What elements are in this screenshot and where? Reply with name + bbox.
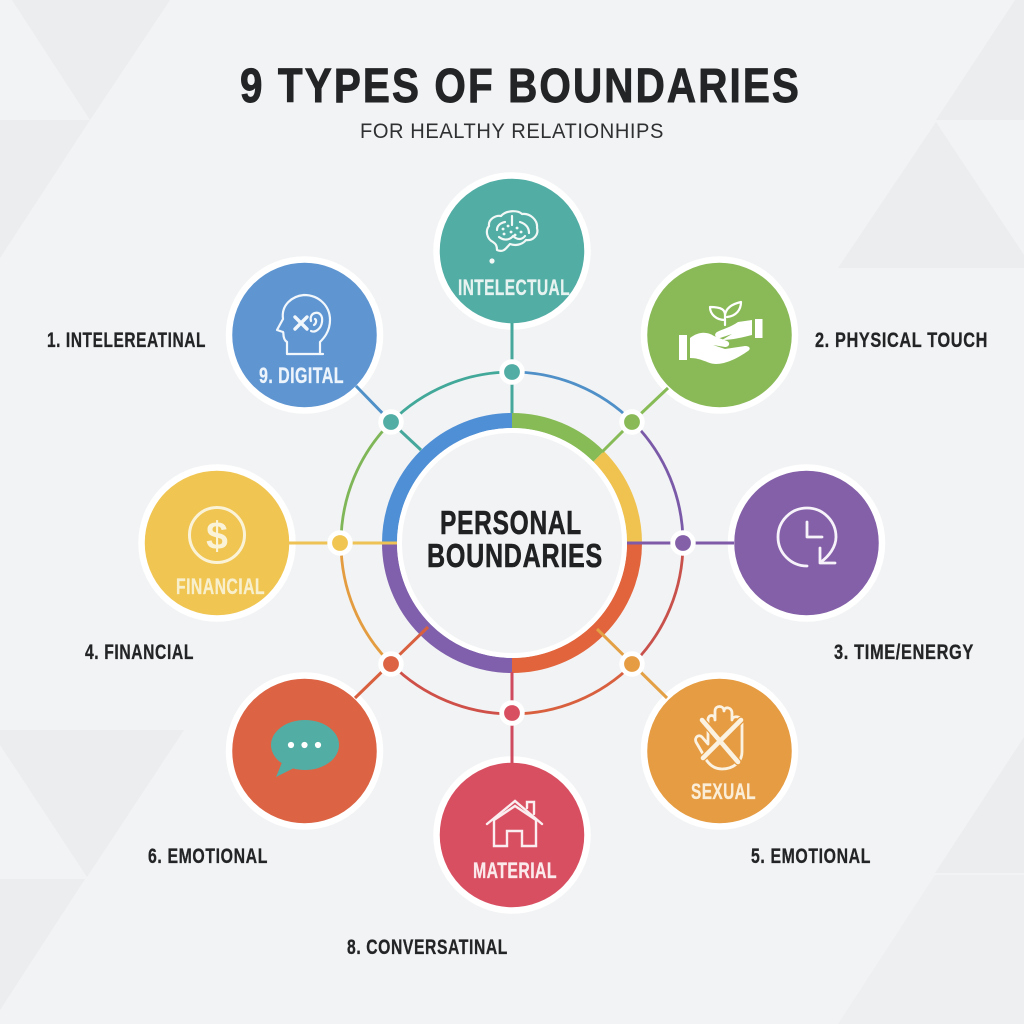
node: left xyxy=(330,533,350,553)
node: upper right xyxy=(622,412,642,432)
panel: time energy circle xyxy=(731,468,882,618)
icon: clock with arrow xyxy=(778,508,836,566)
node: lower left xyxy=(381,654,401,674)
panel: emotional chat circle xyxy=(229,676,380,826)
icon: head with crossed ear xyxy=(277,295,330,354)
panel: digital circle xyxy=(229,260,380,410)
panel: financial circle xyxy=(142,468,292,618)
spokes xyxy=(289,323,734,763)
panel: financial circle: FINANCIAL xyxy=(176,574,265,599)
connecting outer ring arcs xyxy=(341,372,683,714)
node: right xyxy=(673,533,693,553)
icon: dollar coin: $ xyxy=(206,515,228,558)
center circle: personal boundaries xyxy=(400,430,624,656)
node: bottom xyxy=(502,703,522,723)
title: 9 TYPES OF BOUNDARIES xyxy=(240,60,801,113)
label: 8: 8. CONVERSATINAL xyxy=(347,936,508,959)
center circle: personal boundaries: PERSONAL xyxy=(440,504,582,541)
label: 3: 3. TIME/ENERGY xyxy=(834,641,974,664)
icon: hands holding plant xyxy=(679,302,762,364)
icon: crossed hand xyxy=(696,706,742,769)
panel: intellectual circle: INTELECTUAL xyxy=(458,275,570,300)
icon: speech bubble xyxy=(271,720,339,777)
label: 1: 1. INTELEREATINAL xyxy=(47,329,206,352)
panel: intellectual circle xyxy=(436,176,588,326)
icon: house xyxy=(487,801,542,846)
center ring xyxy=(390,420,634,666)
panel: sexual circle: SEXUAL xyxy=(691,779,756,804)
node: top xyxy=(502,362,522,382)
node: lower right xyxy=(622,654,642,674)
panel: sexual circle xyxy=(644,676,795,826)
node: upper left xyxy=(381,412,401,432)
icon: dollar coin xyxy=(190,508,244,562)
panel: physical touch circle xyxy=(644,260,795,410)
label: 5: 5. EMOTIONAL xyxy=(751,845,871,868)
subtitle: FOR HEALTHY RELATIONHIPS xyxy=(360,120,664,143)
panel: digital circle: 9. DIGITAL xyxy=(259,363,344,388)
panel: material circle: MATERIAL xyxy=(473,858,557,883)
panel: material circle xyxy=(436,760,588,910)
icon: brain thought bubble xyxy=(487,211,537,264)
center circle: personal boundaries: BOUNDARIES xyxy=(427,537,603,574)
label: 4: 4. FINANCIAL xyxy=(85,641,194,664)
label: 6: 6. EMOTIONAL xyxy=(148,845,268,868)
